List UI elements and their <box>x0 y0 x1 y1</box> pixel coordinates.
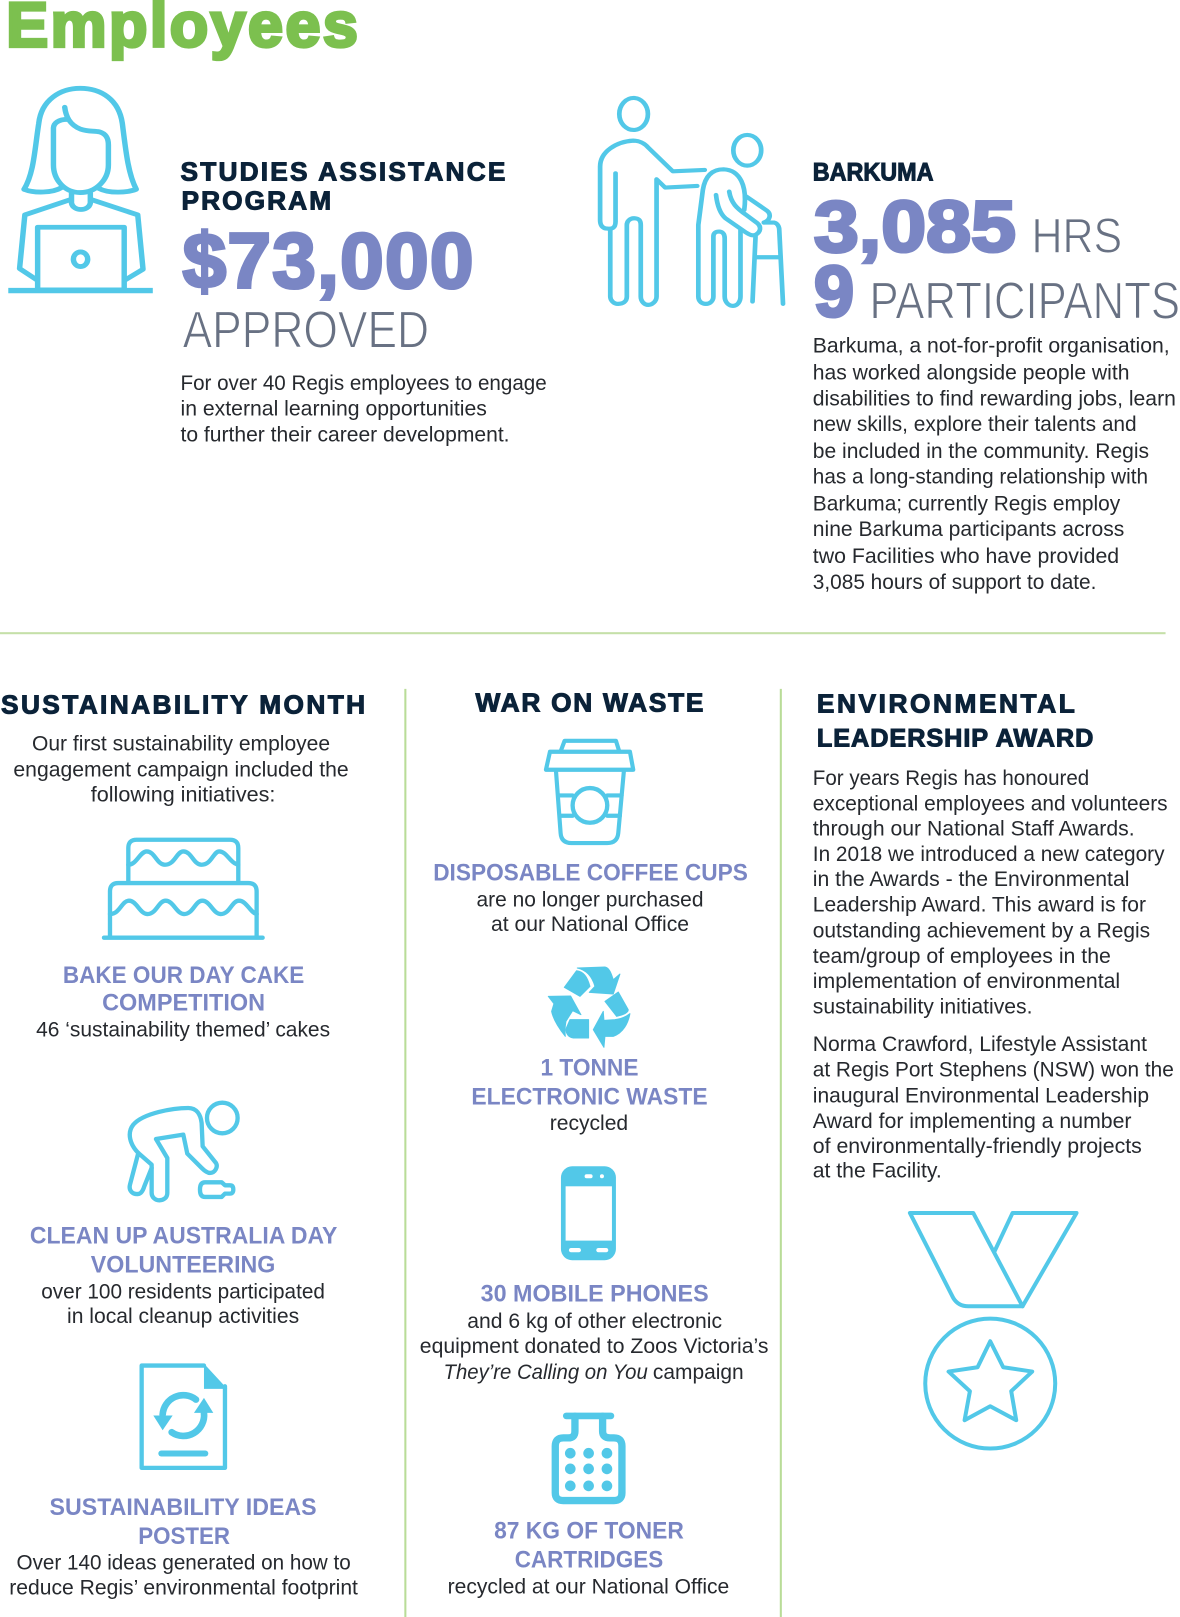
item: toner cartridges: CARTRIDGES <box>515 1548 663 1573</box>
text: studies description: For over 40 Regis employees to engage <box>181 372 547 395</box>
text: studies description <box>181 372 547 446</box>
icon: toner cartridge <box>555 1416 622 1501</box>
icon: layered cake <box>104 840 263 938</box>
heading: environmental leadership award: ENVIRONMENTAL <box>817 689 1075 719</box>
text: barkuma description: new skills, explore their talents and <box>813 413 1137 436</box>
panel: studies assistance program <box>8 88 547 446</box>
text: award description: in the Awards - the Environmental <box>813 868 1129 891</box>
item: electronic waste: 1 TONNE <box>540 1056 638 1082</box>
icon: person picking up bottle <box>130 1103 238 1200</box>
icon: coffee cup <box>546 741 633 843</box>
item: toner cartridges: 87 KG OF TONER <box>494 1519 684 1545</box>
stat: 3,085 hrs: HRS <box>1031 209 1122 264</box>
item: sustainability ideas poster: POSTER <box>138 1524 230 1550</box>
stat: 3,085 hrs: 3,085 <box>814 188 1016 268</box>
heading: studies assistance program: PROGRAM <box>182 185 331 215</box>
stat: $73,000 approved <box>183 217 473 359</box>
item: mobile phones: equipment donated to Zoos Victoria’s <box>420 1335 768 1358</box>
text: award description: exceptional employees and volunteers <box>813 793 1168 816</box>
item: bake our day cake competition <box>36 963 330 1041</box>
icon: woman at laptop <box>8 88 153 291</box>
icon: carer helping person with walker <box>600 98 783 306</box>
text: award winner: inaugural Environmental Leadership <box>813 1084 1149 1107</box>
heading: environmental leadership award: LEADERSHIP AWARD <box>817 725 1093 753</box>
stat: 9 participants <box>814 253 1180 333</box>
text: barkuma description: 3,085 hours of support to date. <box>813 571 1096 594</box>
item: sustainability ideas poster <box>9 1495 358 1599</box>
item: disposable coffee cups: are no longer purchased <box>477 888 703 911</box>
text: barkuma description: two Facilities who have provided <box>813 545 1119 568</box>
icon: document with refresh arrows <box>142 1364 227 1468</box>
item: sustainability ideas poster: Over 140 ideas generated on how to <box>17 1552 351 1575</box>
panel: sustainability month <box>1 690 365 1599</box>
text: award description: sustainability initiatives. <box>813 996 1032 1019</box>
text: sustainability intro: engagement campaign included the <box>13 759 349 782</box>
panel: barkuma <box>600 98 1180 594</box>
text: award description <box>813 767 1168 1019</box>
text: studies description: in external learning opportunities <box>181 398 487 421</box>
icon: medal with star <box>910 1213 1077 1449</box>
text: barkuma description: has worked alongside people with <box>813 362 1129 384</box>
item: bake our day cake competition: 46 ‘sustainability themed’ cakes <box>36 1018 330 1041</box>
item: toner cartridges: recycled at our National Office <box>448 1575 729 1598</box>
item: mobile phones: 30 MOBILE PHONES <box>481 1281 709 1307</box>
heading: environmental leadership award <box>817 689 1093 753</box>
item: bake our day cake competition: COMPETITION <box>102 991 265 1017</box>
text: award winner: of environmentally-friendly projects <box>813 1135 1142 1158</box>
item: clean up australia day <box>30 1224 337 1328</box>
text: barkuma description: Barkuma; currently Regis employ <box>813 492 1121 515</box>
item: clean up australia day: CLEAN UP AUSTRALIA DAY <box>30 1224 337 1250</box>
text: barkuma description: has a long-standing relationship with <box>813 466 1148 489</box>
item: disposable coffee cups: at our National Office <box>491 913 689 936</box>
text: sustainability intro <box>13 733 349 806</box>
item: sustainability ideas poster: reduce Regis’ environmental footprint <box>9 1576 358 1599</box>
stat: $73,000 approved: APPROVED <box>183 301 429 359</box>
text: award winner: Award for implementing a number <box>813 1110 1132 1133</box>
item: clean up australia day: over 100 residents participated <box>41 1280 325 1303</box>
text: award description: For years Regis has honoured <box>813 767 1089 790</box>
item: electronic waste: recycled <box>550 1112 628 1135</box>
item: electronic waste: ELECTRONIC WASTE <box>471 1084 708 1110</box>
item: mobile phones: They’re Calling on You <box>444 1361 648 1384</box>
text: award description: through our National Staff Awards. <box>813 817 1135 840</box>
panel: war on waste <box>420 688 768 1598</box>
text: barkuma description: nine Barkuma participants across <box>813 518 1124 541</box>
text: award description: In 2018 we introduced a new category <box>813 843 1165 866</box>
stat: 3,085 hrs <box>814 188 1122 268</box>
heading: war on waste: WAR ON WASTE <box>476 688 703 718</box>
text: sustainability intro: following initiatives: <box>91 783 275 806</box>
stat: 9 participants: 9 <box>814 253 854 333</box>
stat: $73,000 approved: $73,000 <box>183 217 473 305</box>
text: award description: Leadership Award. This award is for <box>813 894 1146 917</box>
text: barkuma description: Barkuma, a not-for-profit organisation, <box>813 335 1170 358</box>
icon: mobile phone <box>561 1166 616 1260</box>
text: barkuma description: be included in the community. Regis <box>813 440 1149 463</box>
text: sustainability intro: Our first sustainability employee <box>32 733 330 756</box>
heading: barkuma: BARKUMA <box>813 158 933 186</box>
text: award description: team/group of employees in the <box>813 945 1111 968</box>
icon: recycle symbol <box>548 967 630 1047</box>
item: toner cartridges <box>448 1519 729 1598</box>
text: award winner: at Regis Port Stephens (NSW) won the <box>813 1059 1174 1082</box>
text: award description: implementation of environmental <box>813 970 1120 993</box>
text: barkuma description <box>813 335 1176 594</box>
item: mobile phones: campaign <box>653 1361 744 1384</box>
text: award winner: at the Facility. <box>813 1160 942 1183</box>
text: studies description: to further their career development. <box>181 423 510 446</box>
text: award winner: Norma Crawford, Lifestyle Assistant <box>813 1033 1147 1056</box>
heading: sustainability month: SUSTAINABILITY MONTH <box>1 690 365 720</box>
item: mobile phones: and 6 kg of other electronic <box>467 1310 722 1333</box>
item: electronic waste <box>471 1056 708 1135</box>
item: bake our day cake competition: BAKE OUR DAY CAKE <box>63 963 304 989</box>
item: clean up australia day: in local cleanup activities <box>67 1305 299 1328</box>
item: mobile phones <box>420 1281 768 1384</box>
item: disposable coffee cups: DISPOSABLE COFFEE CUPS <box>433 861 748 887</box>
item: sustainability ideas poster: SUSTAINABILITY IDEAS <box>50 1495 317 1521</box>
text: barkuma description: disabilities to find rewarding jobs, learn <box>813 387 1176 410</box>
heading: studies assistance program <box>181 156 505 215</box>
item: disposable coffee cups <box>433 861 748 936</box>
text: award description: outstanding achievement by a Regis <box>813 919 1150 942</box>
heading: studies assistance program: STUDIES ASSISTANCE <box>181 156 505 186</box>
panel: environmental leadership award <box>813 689 1174 1449</box>
item: clean up australia day: VOLUNTEERING <box>91 1253 275 1279</box>
text: award winner <box>813 1033 1174 1183</box>
